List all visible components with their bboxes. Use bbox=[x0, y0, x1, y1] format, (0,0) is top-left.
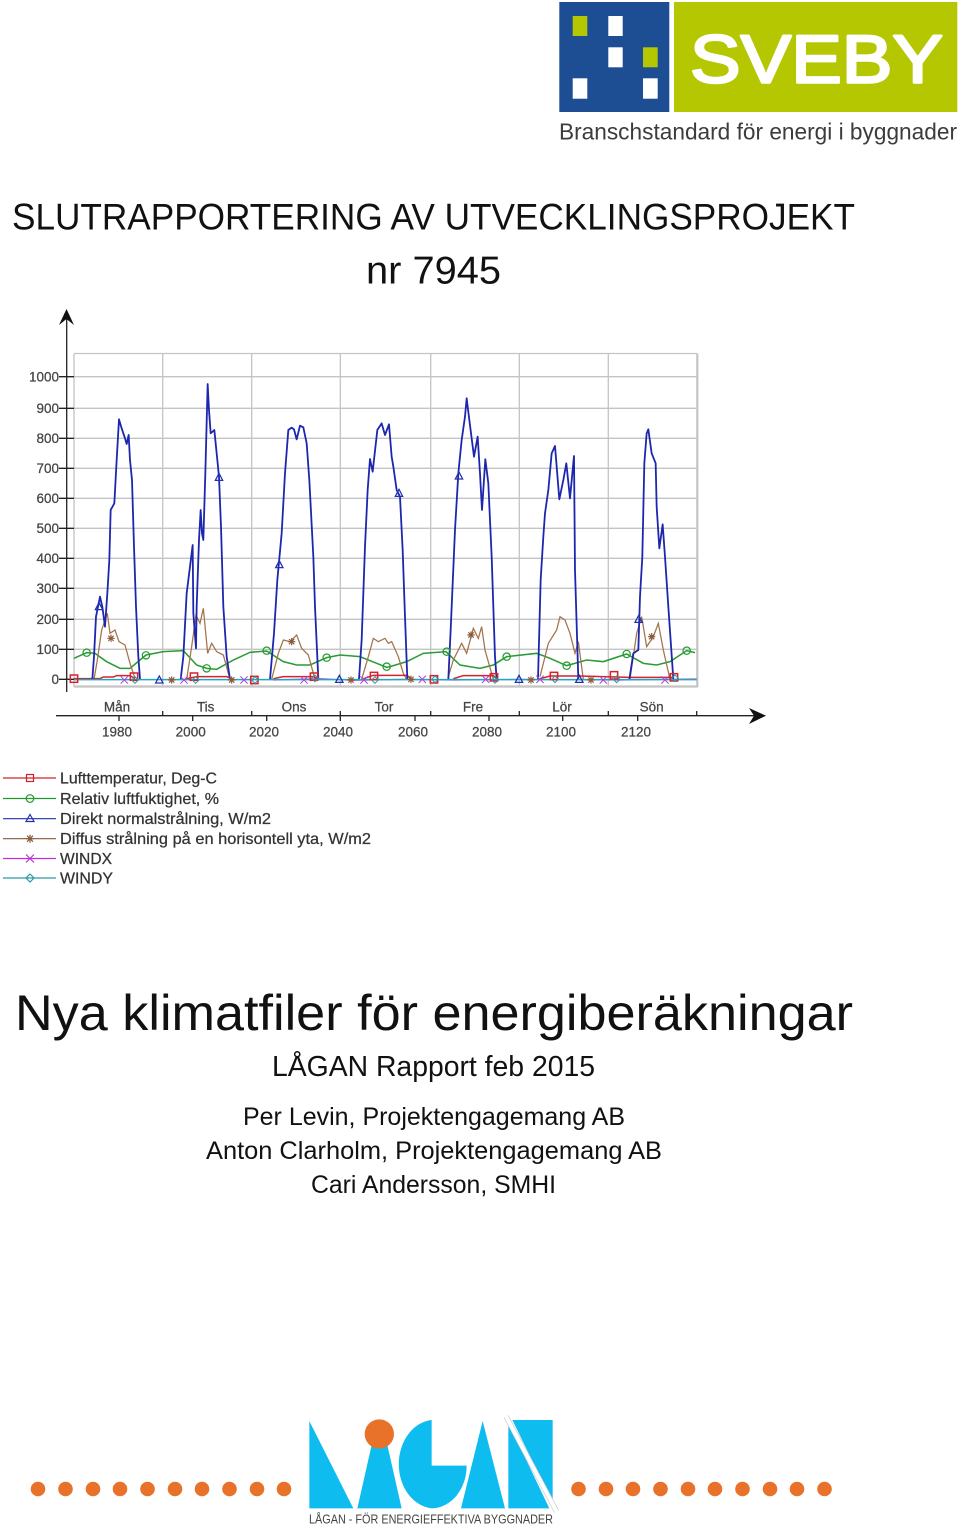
y axis with arrow bbox=[59, 309, 74, 692]
line chart: climate data over one week bbox=[29, 309, 766, 740]
authors: Per Levin, Projektengagemang AB bbox=[243, 1103, 625, 1131]
heading: project number: nr 7945 bbox=[366, 249, 501, 292]
y axis labels: 700 bbox=[36, 461, 59, 476]
legend: relative humidity: Relativ luftfuktighet, % bbox=[60, 791, 219, 808]
x axis hour labels: 2100 bbox=[546, 724, 576, 740]
x axis hour labels: 1980 bbox=[102, 724, 132, 740]
legend: diffuse radiation: Diffus strålning på en horisontell yta, W/m2 bbox=[60, 830, 371, 848]
data markers bbox=[70, 472, 690, 684]
legend: wind y: WINDY bbox=[60, 870, 113, 888]
authors bbox=[206, 1103, 662, 1199]
logo tagline: Branschstandard för energi i byggnader bbox=[559, 118, 957, 144]
logo: SVEBY bbox=[559, 2, 957, 144]
x axis weekday labels: Fre bbox=[463, 700, 483, 714]
x axis hour labels: 2000 bbox=[176, 724, 206, 740]
x axis hour labels: 2080 bbox=[472, 724, 502, 740]
series: wind x bbox=[273, 679, 697, 680]
y axis labels: 600 bbox=[36, 491, 59, 506]
x axis weekday labels: Mån bbox=[104, 700, 130, 714]
y axis labels: 500 bbox=[36, 521, 59, 536]
chart grid bbox=[74, 354, 698, 687]
legend: wind y bbox=[3, 870, 113, 888]
series: direct normal radiation bbox=[92, 384, 673, 679]
x axis hour labels: 2060 bbox=[398, 724, 428, 740]
logo: green SVEBY block bbox=[674, 2, 957, 112]
dot row: left bbox=[31, 1482, 291, 1496]
x axis hour labels: 2020 bbox=[249, 724, 279, 740]
x axis hour labels: 2040 bbox=[323, 724, 353, 740]
y axis labels: 100 bbox=[36, 642, 59, 657]
logo: green SVEBY block: SVEBY bbox=[690, 22, 943, 98]
logo caption: LÅGAN - FÖR ENERGIEFFEKTIVA BYGGNADER bbox=[309, 1512, 553, 1526]
x axis weekday labels: Tis bbox=[197, 700, 215, 714]
authors: Anton Clarholm, Projektengagemang AB bbox=[206, 1137, 662, 1165]
x axis weekday labels bbox=[104, 700, 664, 714]
series: relative humidity bbox=[74, 651, 695, 669]
legend: wind x bbox=[3, 851, 112, 868]
series: diffuse radiation bbox=[94, 608, 670, 679]
y axis labels: 400 bbox=[36, 551, 59, 566]
y axis labels: 800 bbox=[36, 431, 59, 446]
series: air temperature bbox=[74, 675, 673, 679]
authors: Cari Andersson, SMHI bbox=[311, 1171, 556, 1199]
logo: blue building square bbox=[559, 2, 669, 112]
y axis labels: 300 bbox=[36, 581, 59, 596]
dot row: right bbox=[571, 1482, 832, 1496]
legend: direct normal radiation: Direkt normalstrålning, W/m2 bbox=[60, 810, 271, 828]
chart legend bbox=[3, 770, 371, 888]
heading: report type: SLUTRAPPORTERING AV UTVECKLINGSPROJEKT bbox=[12, 196, 855, 238]
y axis labels: 1000 bbox=[29, 370, 59, 384]
x axis weekday labels: Ons bbox=[282, 700, 307, 714]
x axis with arrow bbox=[56, 708, 766, 724]
series: wind y bbox=[74, 677, 697, 682]
logo shapes bbox=[309, 1416, 557, 1512]
subtitle: LÅGAN Rapport feb 2015 bbox=[272, 1051, 595, 1083]
logo: LÅGAN bbox=[309, 1416, 557, 1526]
y axis labels: 0 bbox=[51, 672, 59, 687]
y axis labels: 900 bbox=[36, 401, 59, 416]
legend: wind x: WINDX bbox=[60, 851, 112, 868]
legend: air temperature: Lufttemperatur, Deg-C bbox=[60, 770, 217, 788]
x axis weekday labels: Lör bbox=[552, 700, 572, 714]
x axis hour labels bbox=[102, 724, 651, 740]
x axis hour labels: 2120 bbox=[621, 724, 651, 740]
x axis weekday labels: Tor bbox=[375, 700, 394, 714]
main title: Nya klimatfiler för energiberäkningar bbox=[15, 985, 853, 1041]
y axis labels bbox=[29, 370, 59, 687]
x axis weekday labels: Sön bbox=[640, 700, 664, 714]
y axis labels: 200 bbox=[36, 612, 59, 627]
